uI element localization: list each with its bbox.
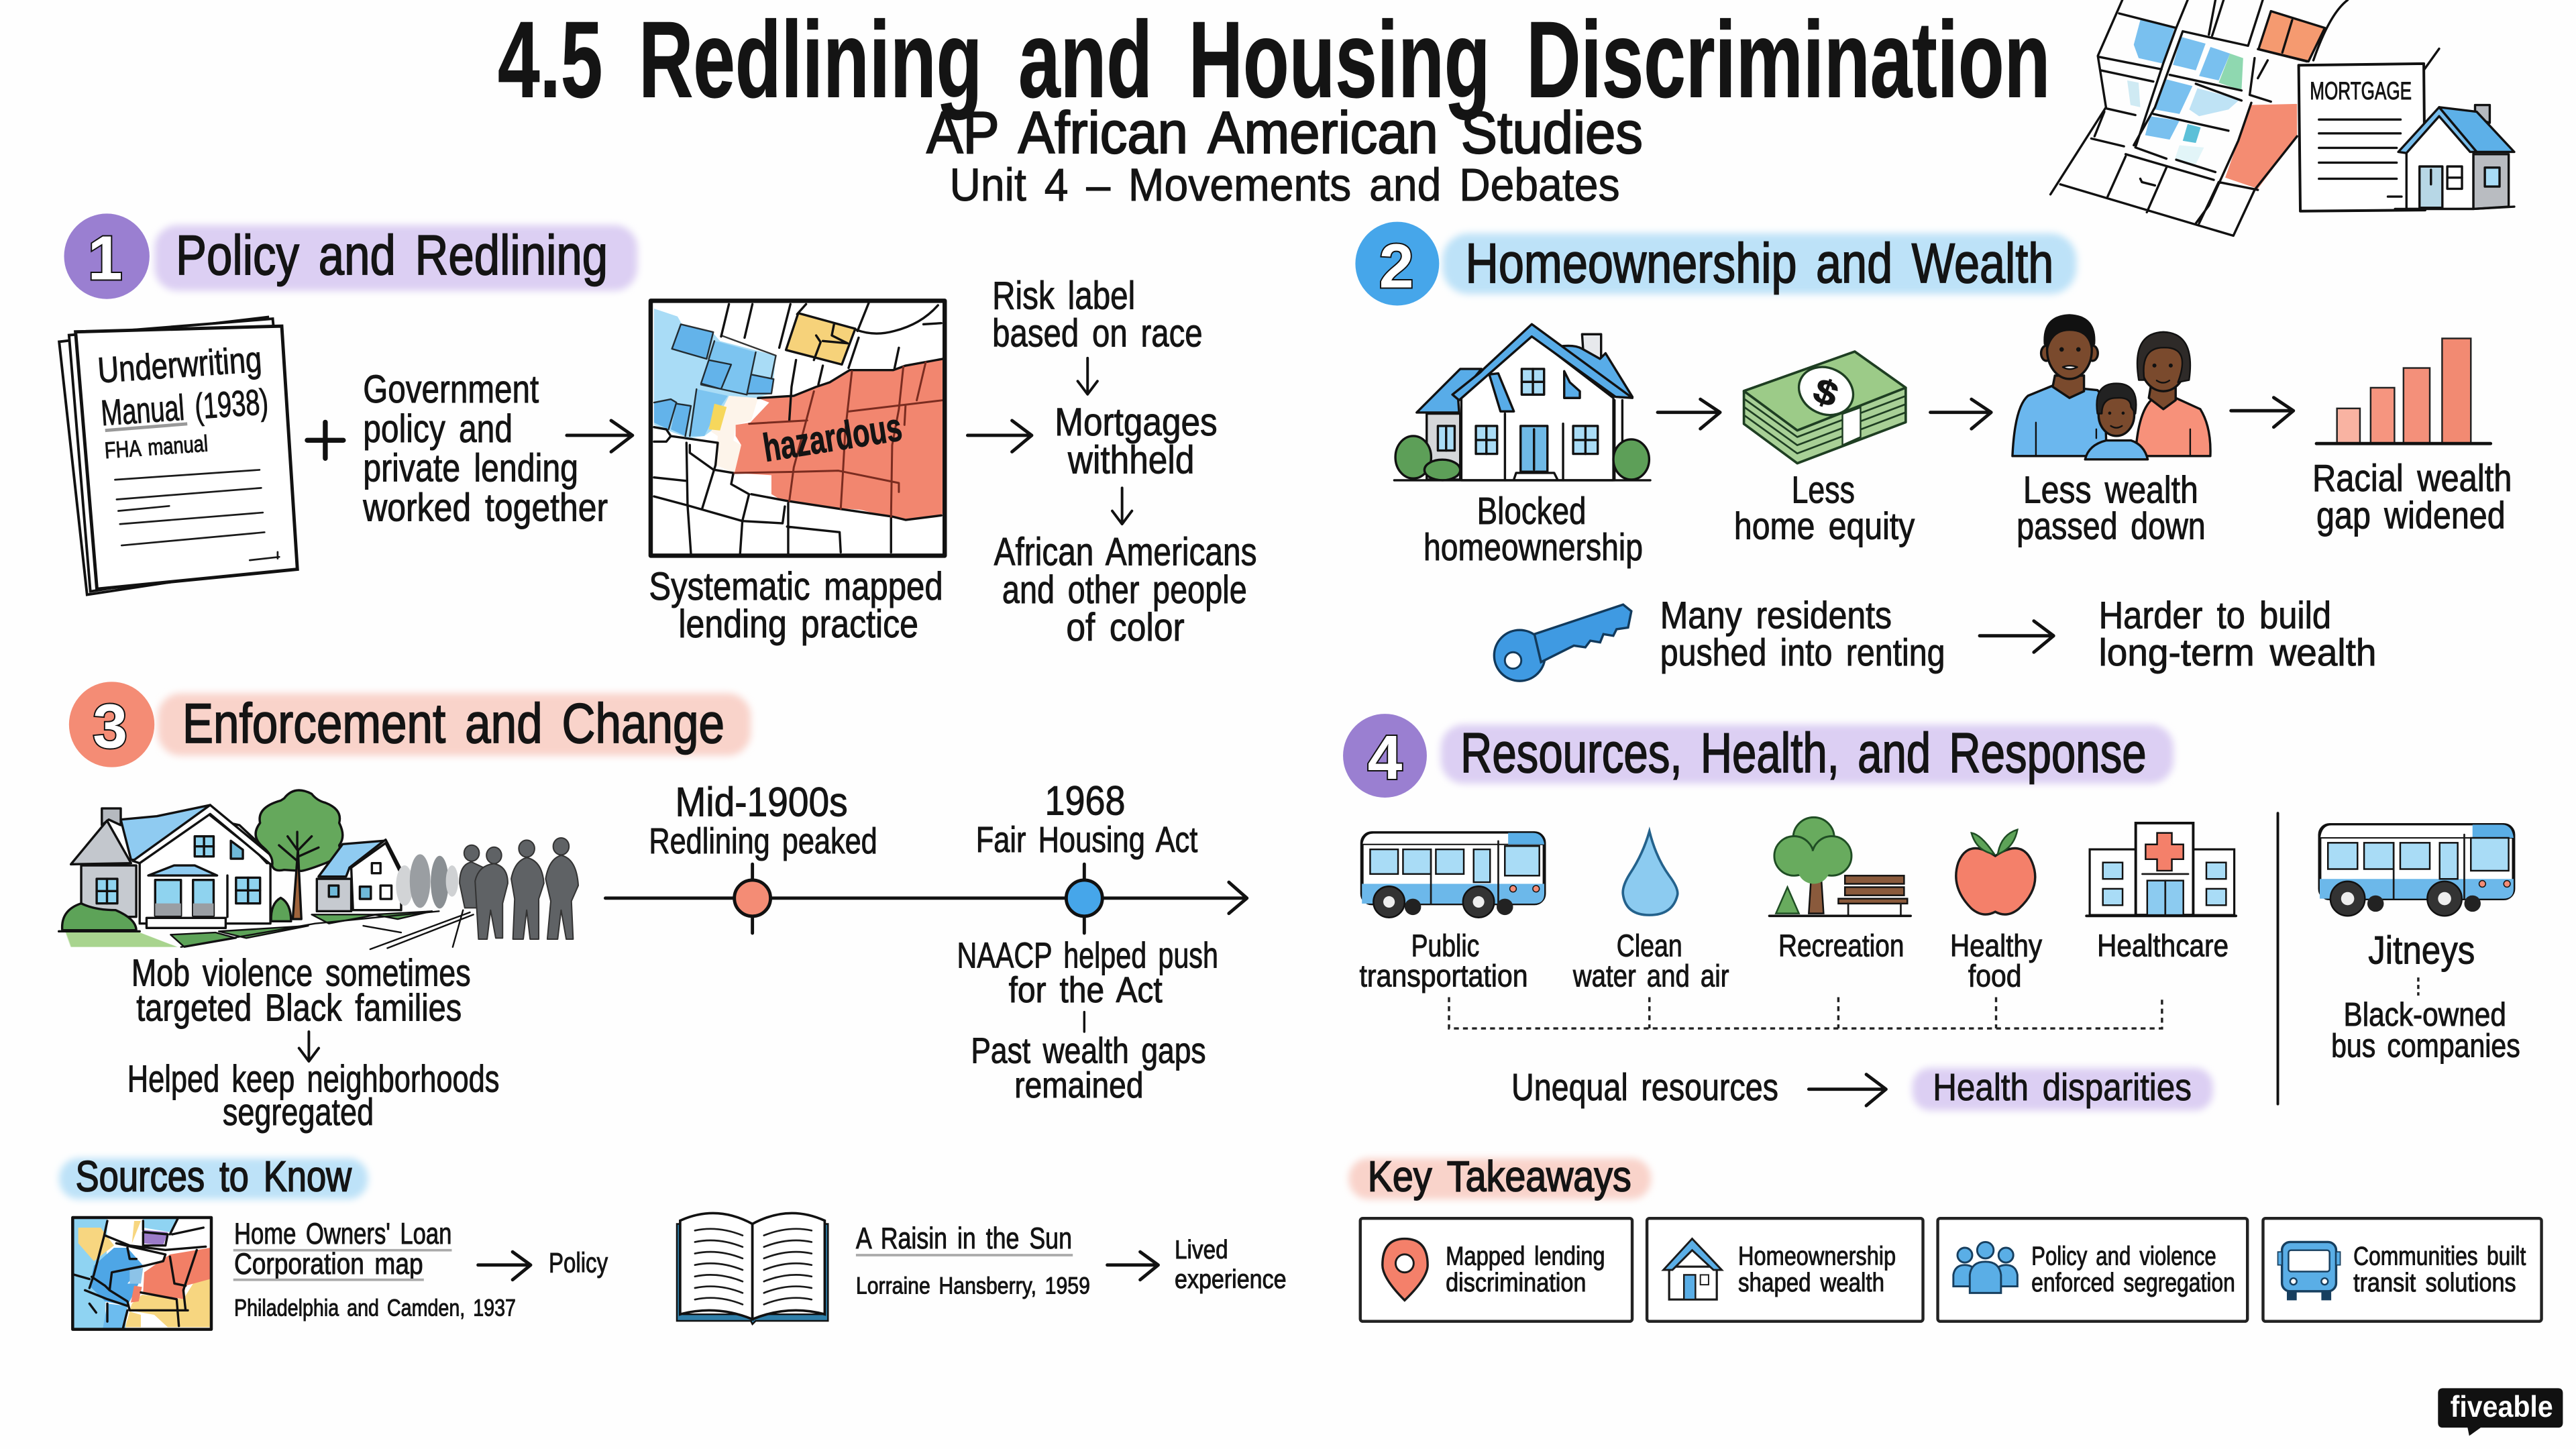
resource labels: Clean <box>1617 928 1682 963</box>
text: segregated neighborhoods <box>127 1057 499 1133</box>
caption: blocked homeownership: homeownership <box>1424 526 1643 568</box>
main house <box>81 865 136 917</box>
label: lived experience <box>1175 1236 1287 1294</box>
card: policy and violence: Policy and violence <box>2031 1242 2216 1271</box>
text: affected people <box>994 530 1256 649</box>
arrow <box>1931 399 1991 429</box>
caption: racial wealth gap: gap widened <box>2316 494 2506 536</box>
resource labels: Public <box>1411 928 1479 963</box>
distant trees <box>396 865 413 906</box>
second house <box>317 879 352 911</box>
heading bar: section 3: Enforcement and Change <box>182 692 724 755</box>
dotted bracket <box>1449 998 2162 1028</box>
icon: water drop <box>1623 831 1678 915</box>
caption: less home equity <box>1734 468 1915 547</box>
house <box>2395 105 2514 209</box>
unit line: Unit 4 – Movements and Debates <box>950 159 1620 211</box>
arrow <box>1658 399 1720 429</box>
heading bar: section 4 <box>1343 714 2174 798</box>
arrow <box>2231 398 2294 427</box>
icon: neighborhood with crowd <box>59 790 578 949</box>
text: affected people: African Americans <box>994 530 1256 574</box>
down arrow <box>299 1032 319 1061</box>
text: past wealth gaps: Past wealth gaps <box>971 1030 1206 1071</box>
card: policy and violence <box>1938 1218 2247 1322</box>
icon: bus <box>1362 833 1544 918</box>
icon: family <box>2012 314 2210 460</box>
card: homeownership: Homeownership <box>1738 1242 1896 1271</box>
arrow <box>478 1252 531 1280</box>
caption: blocked homeownership <box>1424 490 1643 568</box>
panel: 3 enforcement and change <box>59 682 1247 1133</box>
crowd silhouettes <box>460 838 578 939</box>
heading: key takeaways: Key Takeaways <box>1368 1153 1631 1201</box>
map label: hazardous <box>760 405 905 470</box>
heading bar: section 1 <box>64 213 637 299</box>
resource labels: Healthcare <box>2097 928 2229 963</box>
caption: racial wealth gap <box>2312 457 2512 536</box>
panel: key takeaways <box>1349 1153 2542 1322</box>
tree <box>256 790 343 871</box>
label: mid-1900s: Mid-1900s <box>676 780 848 825</box>
text: mortgages withheld <box>1055 400 1218 482</box>
callout: health disparities: Health disparities <box>1933 1066 2192 1108</box>
text: mob violence <box>131 951 471 1029</box>
text: black-owned bus companies <box>2331 997 2520 1065</box>
header: title block <box>498 0 2050 211</box>
heading bar: section 1: 1 <box>88 223 123 292</box>
text: risk label: based on race <box>992 312 1203 356</box>
label: mid-1900s: Redlining peaked <box>649 821 877 861</box>
text: mob violence: Mob violence sometimes <box>131 951 471 994</box>
panel: 4 resources, health, and response <box>1343 714 2520 1111</box>
text: pushed into renting: Many residents <box>1660 594 1892 637</box>
label: 1968 <box>976 778 1197 860</box>
heading bar: section 3: 3 <box>93 691 127 761</box>
text: segregated neighborhoods: segregated <box>223 1091 374 1133</box>
logo: fiveable: fiveable <box>2451 1391 2553 1424</box>
resource labels <box>1360 928 2229 994</box>
icon: hospital <box>2086 823 2236 916</box>
map caption: Systematic mapped <box>649 565 943 608</box>
icon: underwriting manual stack <box>59 317 297 595</box>
text: affected people: of color <box>1066 606 1185 649</box>
icon: money stack: $ <box>1809 370 1843 415</box>
arrow <box>967 421 1032 451</box>
text: mortgages withheld: Mortgages <box>1055 400 1218 444</box>
caption: less home equity: Less <box>1792 468 1855 511</box>
resource labels: transportation <box>1360 959 1528 994</box>
text: government policy: private lending <box>363 447 578 490</box>
label: 1968: Fair Housing Act <box>976 820 1197 860</box>
manual title: Underwriting <box>97 339 263 391</box>
text: past wealth gaps <box>971 1030 1206 1106</box>
resource labels: food <box>1968 959 2021 994</box>
source detail: Lorraine Hansberry, 1959 <box>856 1272 1090 1299</box>
source title: HOLC map: Home Owners' Loan <box>234 1218 451 1250</box>
label: jitneys: Jitneys <box>2368 928 2475 972</box>
label: mortgage: MORTGAGE <box>2310 77 2412 105</box>
card: policy and violence: enforced segregation <box>2031 1269 2235 1297</box>
text: black-owned bus companies: bus companies <box>2331 1028 2520 1065</box>
text: government policy: Government <box>363 368 539 411</box>
redlining map <box>651 301 945 555</box>
resource labels: Recreation <box>1778 928 1904 963</box>
text: mortgages withheld: withheld <box>1067 438 1194 482</box>
map caption: lending practice <box>678 602 918 646</box>
icon: key <box>1494 604 1631 681</box>
heading bar: section 4: 4 <box>1368 722 1403 792</box>
icon: jitney bus <box>2320 824 2514 916</box>
dotted connector <box>2418 977 2419 996</box>
text: unequal resources: Unequal resources <box>1511 1066 1778 1108</box>
mortgage document <box>2299 49 2439 211</box>
source title: HOLC map <box>233 1218 451 1281</box>
caption: less wealth passed down: passed down <box>2017 504 2206 547</box>
source title: HOLC map: Corporation map <box>234 1248 423 1281</box>
marker: mid-1900s <box>735 880 771 916</box>
caption: less wealth passed down: Less wealth <box>2023 468 2198 511</box>
card: mapped lending: Mapped lending <box>1446 1242 1605 1271</box>
timeline <box>605 864 1247 933</box>
heading bar: section 2 <box>1355 222 2077 306</box>
resource labels: Healthy <box>1950 928 2043 963</box>
plus sign <box>307 422 343 458</box>
text: long-term wealth: long-term wealth <box>2099 631 2376 674</box>
icon: HOLC map <box>72 1218 211 1330</box>
card: transit solutions: Communities built <box>2353 1242 2526 1271</box>
icon: open book <box>677 1213 828 1324</box>
connector <box>1083 1012 1085 1032</box>
manual subtitle: FHA manual <box>104 431 209 464</box>
arrow <box>1809 1075 1886 1106</box>
marker: 1968 <box>1066 880 1102 916</box>
chart: widening wealth gap bars <box>2316 338 2491 443</box>
tilted redlining map <box>2051 0 2348 235</box>
card: mapped lending: discrimination <box>1446 1269 1586 1297</box>
text: past wealth gaps: remained <box>1014 1065 1143 1106</box>
icon: money stack <box>1744 352 1906 464</box>
heading bar: section 2: Homeownership and Wealth <box>1465 232 2053 294</box>
text: segregated neighborhoods: Helped keep neighborhoods <box>127 1057 499 1099</box>
down arrow <box>1112 488 1132 524</box>
text: government policy: worked together <box>362 486 608 529</box>
text: long-term wealth <box>2099 594 2376 674</box>
card: homeownership: shaped wealth <box>1738 1269 1884 1297</box>
divider <box>2277 813 2279 1104</box>
card: mapped lending <box>1360 1218 1632 1322</box>
card: transit solutions: transit solutions <box>2353 1269 2516 1297</box>
icon: house <box>1394 324 1650 480</box>
text: NAACP <box>957 935 1218 1010</box>
arrow <box>1108 1252 1159 1280</box>
card: homeownership <box>1647 1218 1923 1322</box>
label: mid-1900s <box>649 780 877 861</box>
caption: less home equity: home equity <box>1734 504 1915 547</box>
icon: tree and bench <box>1770 817 1911 916</box>
heading bar: section 4: Resources, Health, and Response <box>1460 722 2147 784</box>
down arrow <box>1078 358 1097 394</box>
source detail: Philadelphia and Camden, 1937 <box>234 1295 516 1322</box>
subtitle: AP African American Studies <box>926 99 1643 166</box>
heading: sources to know: Sources to Know <box>76 1153 352 1201</box>
card: transit solutions <box>2263 1218 2542 1322</box>
text: affected people: and other people <box>1002 568 1247 612</box>
heading bar: section 2: 2 <box>1379 231 1414 301</box>
label: lived experience: experience <box>1175 1265 1287 1294</box>
label: 1968: 1968 <box>1045 778 1126 824</box>
icon: apple <box>1956 830 2035 914</box>
caption: blocked homeownership: Blocked <box>1477 490 1586 532</box>
caption: racial wealth gap: Racial wealth <box>2312 457 2512 499</box>
icon: underwriting manual stack: Manual (1938) <box>99 382 270 433</box>
map caption <box>649 565 943 646</box>
text: pushed into renting <box>1660 594 1945 674</box>
text: NAACP: for the Act <box>1009 970 1163 1010</box>
panel: 1 policy and redlining <box>59 213 1256 649</box>
text: government policy <box>362 368 608 529</box>
panel: sources to know <box>59 1153 1287 1330</box>
text: NAACP: NAACP helped push <box>957 935 1218 975</box>
resource labels: water and air <box>1572 959 1729 994</box>
text: mob violence: targeted Black families <box>136 987 462 1029</box>
heading bar: section 1: Policy and Redlining <box>176 224 608 286</box>
caption: less wealth passed down <box>2017 468 2206 547</box>
label: policy: Policy <box>549 1247 608 1279</box>
icon: map, mortgage document and house <box>2051 0 2514 235</box>
label: lived experience: Lived <box>1175 1236 1228 1265</box>
text: black-owned bus companies: Black-owned <box>2343 997 2506 1033</box>
text: pushed into renting: pushed into renting <box>1660 631 1945 674</box>
text: long-term wealth: Harder to build <box>2099 594 2331 637</box>
logo: fiveable <box>2438 1388 2563 1436</box>
heading bar: section 3 <box>69 682 751 767</box>
arrow <box>1980 621 2053 652</box>
text: risk label: Risk label <box>992 274 1135 317</box>
arrow <box>567 421 633 451</box>
text: government policy: policy and <box>363 407 513 451</box>
source title: A Raisin in the Sun: A Raisin in the Sun <box>856 1222 1072 1255</box>
text: risk label <box>992 274 1203 356</box>
panel: 2 homeownership and wealth <box>1355 222 2512 681</box>
